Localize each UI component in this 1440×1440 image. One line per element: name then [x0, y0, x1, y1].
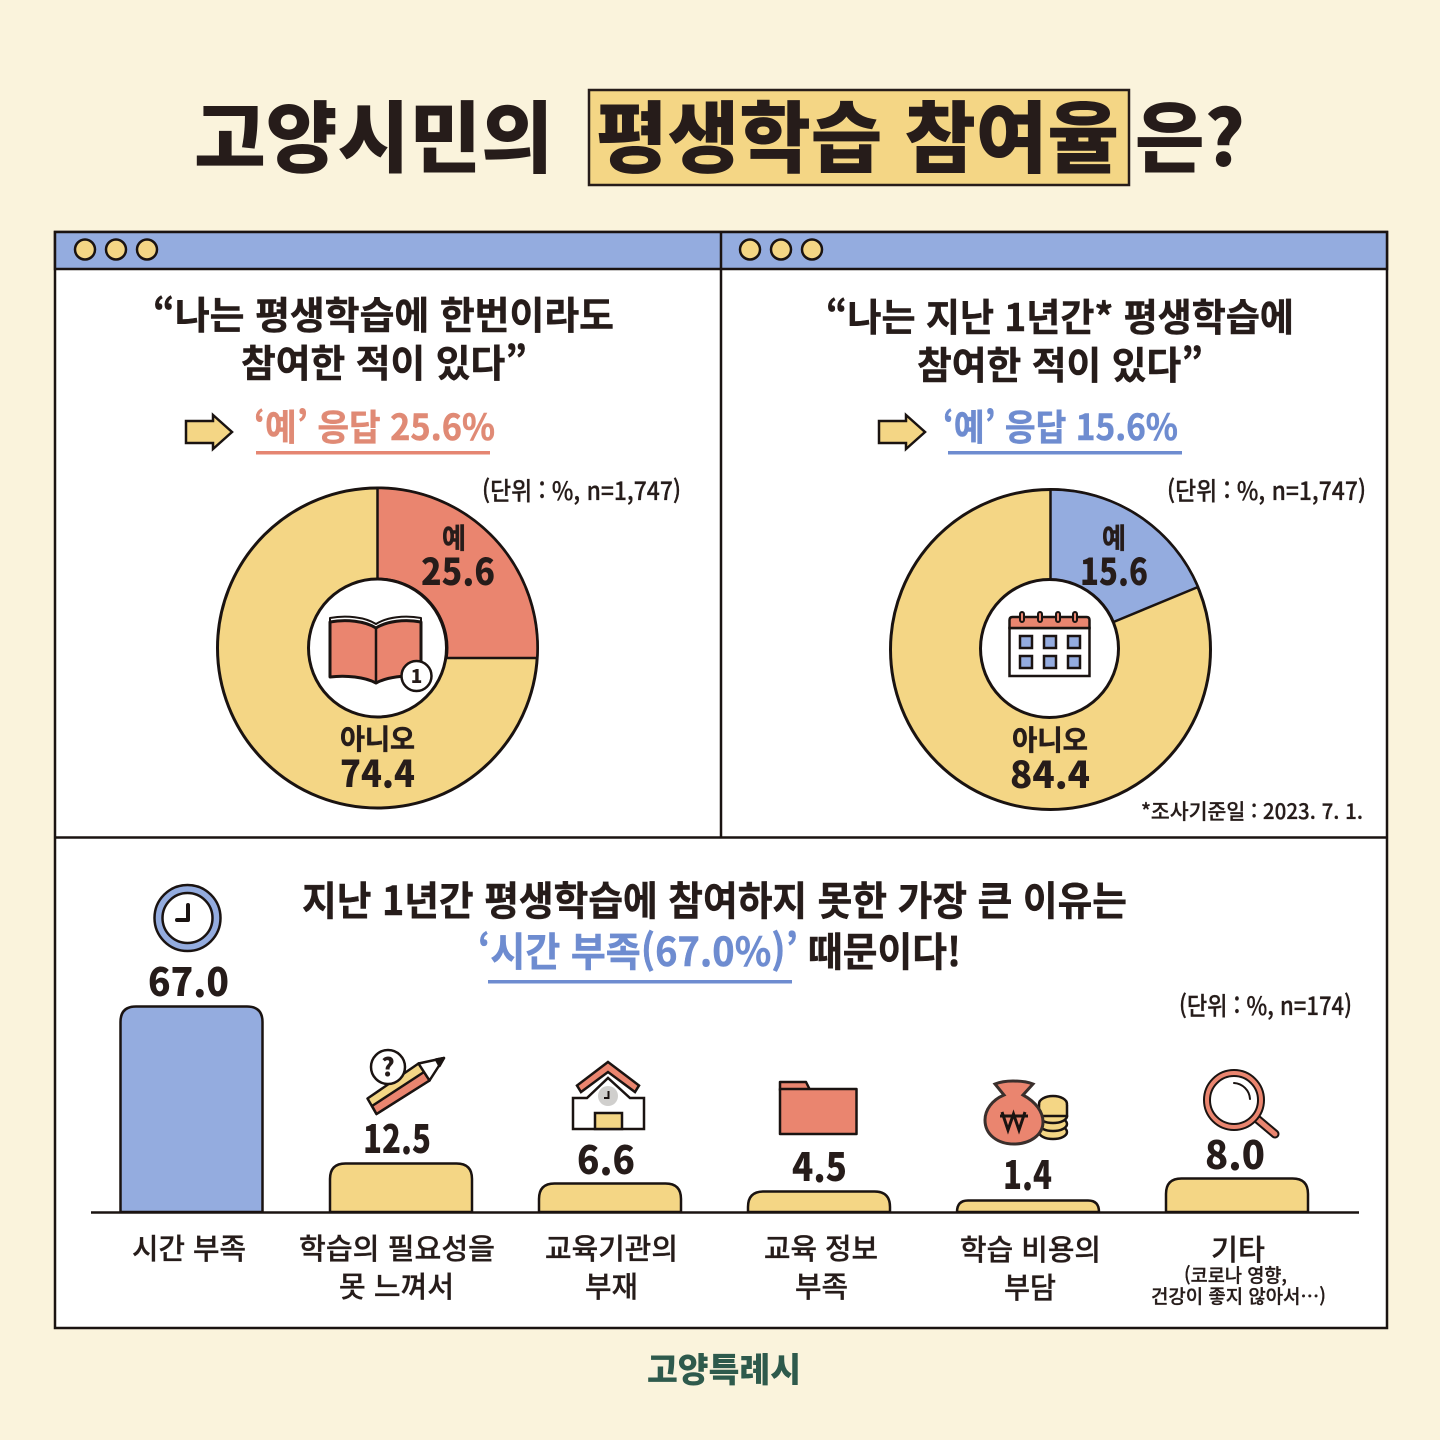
icon: money bag and coins [985, 1081, 1067, 1144]
logo: Goyang city: 고양특례시 [647, 1343, 801, 1392]
bar labels: 부족 [795, 1264, 848, 1306]
heading: reasons: ‘시간 부족(67.0%)’ [478, 920, 798, 978]
donut chart: left: 아니오 [340, 718, 415, 758]
bar labels: 교육기관의 [545, 1226, 678, 1268]
footnote: survey date: *조사기준일 : 2023. 7. 1. [1141, 796, 1363, 826]
bar labels: 교육 정보 [764, 1226, 878, 1268]
bar values: 4.5 [792, 1137, 847, 1193]
title: 은? [1135, 77, 1245, 189]
bar labels: 못 느껴서 [339, 1264, 454, 1306]
title: 고양시민의 [194, 77, 553, 189]
heading: reasons: 때문이다! [808, 920, 961, 978]
bar labels: 학습 비용의 [960, 1227, 1101, 1269]
arrow: right answer [879, 415, 925, 449]
icon: folder [780, 1082, 856, 1134]
bar labels: 부재 [585, 1264, 638, 1306]
answer: 25.6%: ‘예’ 응답 25.6% [254, 399, 495, 451]
donut chart: right: 예 [1102, 517, 1126, 557]
unit note left: (단위 : %, n=1,747) [482, 472, 681, 508]
bar labels: (코로나 영향, [1184, 1261, 1287, 1288]
icon: pencil with question mark: ? [381, 1048, 395, 1084]
donut chart: left: 25.6 [421, 542, 495, 596]
bar values: 12.5 [363, 1109, 431, 1165]
bar labels: 학습의 필요성을 [299, 1226, 495, 1268]
icon: calendar [1010, 612, 1090, 676]
panel: reasons for not participating [91, 869, 1359, 1309]
bar values: 1.4 [1003, 1145, 1052, 1201]
icon: magnifying glass [1207, 1073, 1275, 1134]
panel: past year participation [826, 287, 1366, 826]
bar labels: 건강이 좋지 않아서…) [1151, 1282, 1326, 1309]
icon: open book [330, 617, 432, 691]
bar values [148, 952, 1265, 1201]
heading: past year question: “나는 지난 1년간* 평생학습에 [826, 287, 1294, 342]
bar labels: 부담 [1004, 1265, 1056, 1307]
answer: 15.6%: ‘예’ 응답 15.6% [943, 399, 1178, 451]
bar values: 8.0 [1205, 1125, 1265, 1181]
donut chart: left: 74.4 [340, 744, 415, 798]
unit note right: (단위 : %, n=1,747) [1167, 472, 1366, 508]
arrow: left answer [186, 415, 232, 449]
bar labels: 기타 [1211, 1227, 1265, 1269]
donut chart: right [890, 489, 1210, 810]
donut chart: right: 아니오 [1012, 719, 1088, 759]
icon: pencil with question mark [368, 1048, 444, 1114]
bar chart [91, 1006, 1359, 1212]
heading: reasons [302, 869, 1127, 984]
icon: clock [154, 885, 220, 951]
heading: lifetime question [153, 285, 614, 388]
heading: past year question [826, 287, 1294, 390]
donut chart: right: 15.6 [1080, 542, 1148, 596]
unit note bars: (단위 : %, n=174) [1179, 987, 1352, 1023]
donut chart: left [218, 488, 538, 808]
panel: window frame [55, 232, 1387, 1328]
icon: open book: 1 [411, 662, 422, 689]
heading: lifetime question: “나는 평생학습에 한번이라도 [153, 285, 614, 340]
title [194, 77, 1245, 189]
heading: lifetime question: 참여한 적이 있다” [241, 333, 527, 388]
donut chart: left: 예 [442, 517, 466, 557]
bar labels [132, 1226, 1326, 1309]
icon: school [573, 1062, 644, 1129]
bar values: 6.6 [577, 1130, 635, 1186]
bar labels: 시간 부족 [132, 1226, 246, 1268]
bar values: 67.0 [148, 952, 229, 1008]
heading: past year question: 참여한 적이 있다” [917, 335, 1203, 390]
donut chart: right: 84.4 [1010, 745, 1090, 799]
title: 평생학습 참여율 [596, 77, 1119, 189]
heading: reasons: 지난 1년간 평생학습에 참여하지 못한 가장 큰 이유는 [302, 869, 1127, 927]
panel: lifetime participation [153, 285, 681, 808]
